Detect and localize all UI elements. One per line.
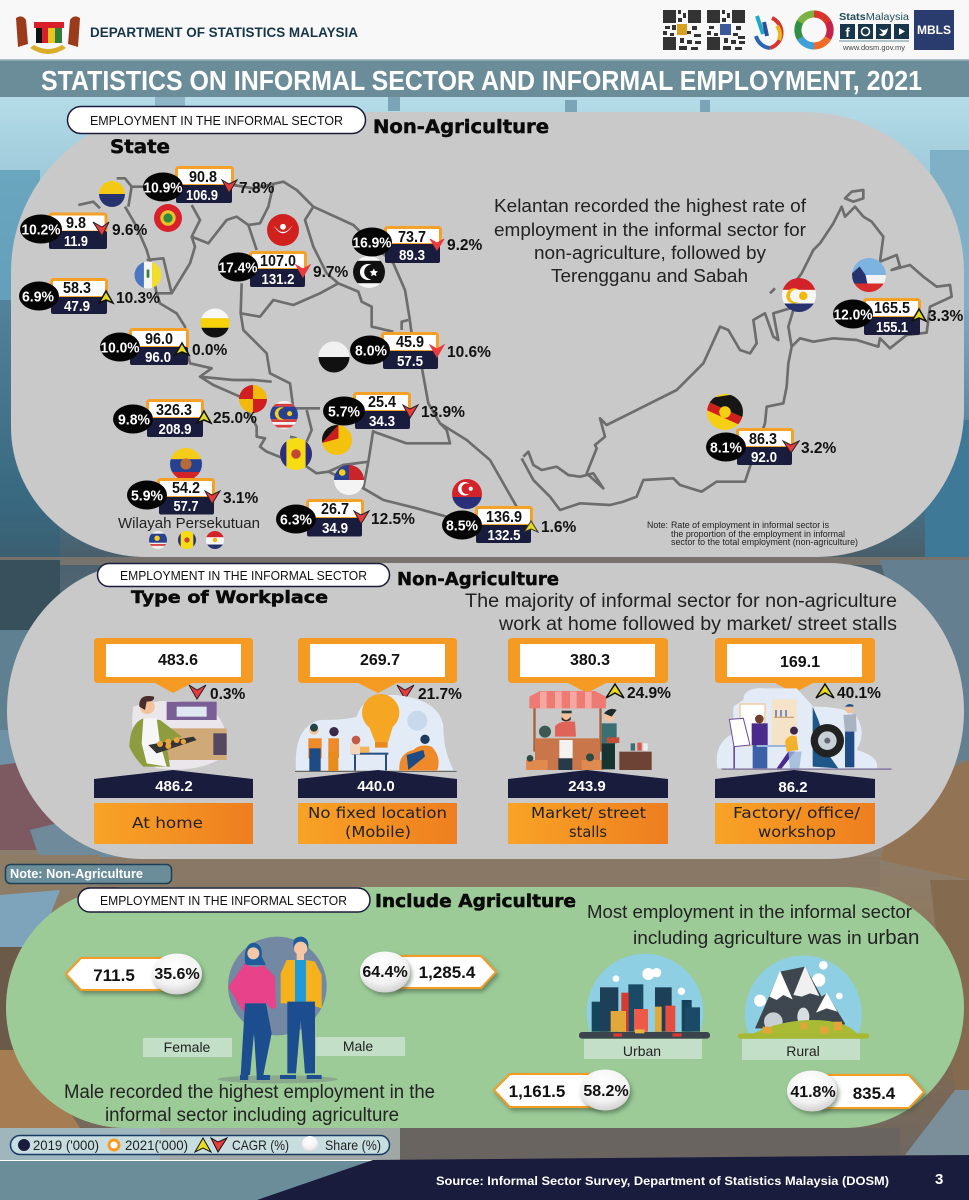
data: Melaka: 6.3% [280,512,312,528]
footer bar [0,1155,969,1200]
flag: Selangor [239,385,267,413]
note: rate definition: sector to the total employment (non-agriculture) [671,537,858,548]
data: Terengganu: 73.7 [398,229,426,246]
label: Male: Male [343,1038,373,1054]
QR code 2 [707,10,745,50]
statement: majority at home [465,591,897,635]
subheading: Type of Workplace: Type of Workplace [131,588,328,607]
logo: StatsMalaysia social: www.dosm.gov.my [842,43,905,52]
header bar [0,0,969,59]
data: Johor: 132.5 [488,527,520,544]
data: Perlis: 9.8 [66,215,86,232]
card: market/ street stalls: 380.3 [570,652,610,669]
data: Pahang: 57.5 [397,353,423,370]
data: Perak [100,330,228,366]
card: no fixed location: 440.0 [357,778,395,795]
flag: Sabah [852,258,886,292]
data: Sarawak: 86.3 [749,431,777,448]
data: Penang [19,280,160,315]
data: Selangor: 9.8% [118,412,150,428]
coat of arms logo [16,6,80,54]
flag: Malaysia [270,401,298,429]
flag: Kelantan [267,214,299,246]
flag: Putrajaya style [280,438,312,470]
data: Penang: 10.3% [116,290,160,307]
statement: Kelantan highest rate: employment in the informal sector for [494,220,806,240]
value tag: male [360,952,496,992]
value tag: male: 64.4% [362,964,408,981]
card: no fixed location: (Mobile) [345,823,411,841]
panel heading pill: EMPLOYMENT IN THE INFORMAL SECTOR [90,113,343,128]
panel heading pill [78,888,370,912]
data: Pahang: 45.9 [396,334,424,351]
flag: Terengganu [353,256,385,288]
data: Negeri Sembilan: 13.9% [421,404,465,421]
data: Melaka [276,500,415,537]
card: factory/ office/ workshop: workshop [758,823,836,841]
card: no fixed location: 269.7 [360,652,400,669]
logo: SDG wheel [798,14,830,46]
card: market/ street stalls: stalls [569,823,607,841]
value tag: female: 711.5 [93,966,135,985]
data: Terengganu: 89.3 [399,247,425,264]
data: Negeri Sembilan [323,394,465,430]
subheading: State: State [110,136,170,158]
data: Johor [442,508,577,544]
flag: Penang [134,262,162,288]
value tag: rural: 835.4 [853,1084,896,1103]
panel: type of workplace [7,563,964,859]
card: market/ street stalls [508,638,671,844]
data: Sarawak: 3.2% [801,440,837,457]
data: Penang: 47.9 [64,298,90,315]
card: no fixed location: No fixed location [308,804,447,822]
legend: Share (%) [325,1137,381,1153]
data: Kelantan: 9.7% [313,264,349,281]
card: no fixed location [295,638,462,844]
data: Sarawak: 92.0 [751,449,777,466]
statement: urban [587,901,919,949]
data: Federal Territory [127,480,259,515]
flag: Perlis [99,181,125,207]
card: at home: 0.3% [210,686,246,703]
statement: male highest: informal sector including agriculture [105,1105,399,1126]
data: Sabah: 155.1 [876,319,908,336]
data: Federal Territory: 3.1% [223,490,259,507]
data: Perlis: 9.6% [112,222,148,239]
data: Penang: 6.9% [22,288,54,306]
statement: Kelantan highest rate: Terengganu and Sabah [551,266,748,286]
data: Terengganu [352,228,483,264]
data: Sabah: 3.3% [928,308,964,325]
label: Urban: Urban [623,1043,661,1059]
data: Kedah: 106.9 [186,187,218,204]
data: Kedah [143,168,275,204]
card: market/ street stalls: 243.9 [568,778,606,795]
panel heading pill: EMPLOYMENT IN THE INFORMAL SECTOR [100,893,347,908]
statement: majority at home: work at home followed by market/ street stalls [498,614,897,635]
organisation name: DEPARTMENT OF STATISTICS MALAYSIA [90,25,358,40]
QR code 1 [663,10,701,50]
data: Penang: 58.3 [63,280,91,297]
legend: CAGR (%) [232,1137,289,1153]
panel heading pill: EMPLOYMENT IN THE INFORMAL SECTOR [120,568,367,583]
flag: Labuan [782,278,816,312]
legend: 2021('000) [125,1137,188,1153]
illustration: urban skyline [579,954,710,1039]
data: Johor: 1.6% [541,519,577,536]
label: Urban [584,1039,702,1059]
data: Perlis [20,214,148,250]
flag: Kedah [154,204,182,232]
illustration: rural mountains [738,956,869,1039]
statement: majority at home: The majority of informal sector for non-agriculture [465,591,897,612]
data: Kelantan: 131.2 [262,271,294,288]
statement: Kelantan highest rate [494,196,807,286]
logo: StatsMalaysia social [839,11,909,52]
data: Perak: 0.0% [192,342,228,359]
flag: Melaka [334,465,364,495]
data: Sarawak: 8.1% [710,440,742,456]
data: Federal Territory: 54.2 [172,480,200,497]
note chip: Note: Non-Agriculture [10,867,143,881]
illustration: mobile workers and light bulb [295,694,457,772]
label: Male [316,1037,405,1056]
flag: Sarawak [707,394,743,430]
value tag: urban: 1,161.5 [509,1082,565,1101]
statement: male highest: Male recorded the highest employment in the [64,1082,435,1103]
data: Negeri Sembilan: 5.7% [328,404,360,420]
panel: include agriculture [6,887,964,1128]
data: Perlis: 10.2% [22,222,60,238]
data: Kedah: 90.8 [189,169,217,186]
data: Selangor [113,400,257,438]
logo: MBLS: MBLS [917,23,951,37]
card: at home: 486.2 [155,778,193,795]
data: Kedah: 7.8% [239,180,275,197]
flag: Federal Territory [170,448,202,480]
note: rate definition: Note: [647,520,668,531]
label: Female: Female [164,1039,211,1055]
flag: Perak [200,308,230,338]
card: factory/ office/ workshop: 86.2 [778,779,808,796]
subheading: Include Agriculture: Include Agriculture [375,891,576,912]
flag: Negeri Sembilan [322,425,352,455]
value tag: female [66,954,202,994]
statement: male highest [64,1082,435,1126]
statement: Kelantan highest rate: non-agriculture, followed by [534,243,766,263]
legend: 2019 ('000) [33,1137,99,1153]
illustration: market stall [526,691,652,770]
data: Federal Territory: 5.9% [131,488,163,504]
data: Melaka: 12.5% [371,511,415,528]
data: Melaka: 34.9 [322,520,348,537]
data: Kelantan: 17.4% [218,260,258,276]
page number: 3 [935,1171,943,1188]
subheading: Non-Agriculture: Non-Agriculture [373,116,549,138]
data: Negeri Sembilan: 25.4 [368,394,396,411]
map: Peninsular Malaysia outline [78,178,517,533]
value tag: male: 1,285.4 [419,963,476,982]
map: East Malaysia outline [522,190,952,510]
card: at home [94,638,253,844]
data: Kelantan [218,252,349,288]
card: factory/ office/ workshop: 169.1 [780,654,820,671]
panel heading pill [68,106,366,134]
card: at home: At home [132,814,203,832]
data: Selangor: 208.9 [158,421,192,438]
data: Terengganu: 9.2% [447,237,483,254]
data: Sarawak [706,430,837,466]
label: Wilayah Persekutuan: Wilayah Persekutuan [118,516,260,532]
card: market/ street stalls: 24.9% [627,685,671,702]
mini flags: federal territories [149,531,224,549]
flag: Pahang [318,342,350,372]
card: market/ street stalls: Market/ street [531,804,646,822]
card: no fixed location: 21.7% [418,686,462,703]
statement: urban: including agriculture was in urban [633,926,919,949]
data: Sabah: 12.0% [834,306,872,324]
data: Sabah: 165.5 [874,300,910,317]
data: Melaka: 26.7 [321,501,349,518]
data: Negeri Sembilan: 34.3 [369,413,395,430]
data: Federal Territory: 57.7 [174,498,198,515]
data: Johor: 8.5% [446,518,478,534]
data: Sabah [833,300,964,336]
card: at home: 483.6 [158,652,198,669]
data: Pahang [350,334,491,370]
data: Pahang: 10.6% [447,344,491,361]
statement: Kelantan highest rate: Kelantan recorded the highest rate of [494,196,807,216]
illustration: male and female figures [218,937,338,1083]
logo: StatsMalaysia social: StatsMalaysia [839,11,909,23]
label: Rural [742,1039,860,1060]
data: Perlis: 11.9 [64,233,88,250]
value tag: rural: 41.8% [790,1084,836,1101]
data: Terengganu: 16.9% [352,234,392,252]
value tag: rural [787,1070,924,1112]
panel: state map [11,106,964,557]
data: Perak: 10.0% [100,340,140,356]
data: Kelantan: 107.0 [260,253,296,270]
card: factory/ office/ workshop [715,638,892,844]
subheading: Non-Agriculture: Non-Agriculture [397,569,559,590]
data: Selangor: 25.0% [213,410,257,427]
note chip [6,864,172,884]
logo: MBLS [914,10,954,50]
legend [10,1136,390,1154]
data: Perak: 96.0 [145,331,173,348]
flag: Johor [452,479,482,509]
label: Rural: Rural [786,1043,820,1059]
panel heading pill [98,564,390,586]
label: Female [143,1038,232,1057]
card: factory/ office/ workshop: 40.1% [837,685,881,702]
logo: swirl [756,16,782,48]
source text: Source: Informal Sector Survey, Department of Statistics Malaysia (DOSM) [436,1174,889,1188]
note: rate definition: the proportion of the employment in informal [671,529,845,540]
note: rate definition [647,520,858,548]
data: Selangor: 326.3 [156,402,192,419]
note: rate definition: Rate of employment in informal sector is [671,520,829,531]
value tag: urban: 58.2% [583,1083,629,1100]
illustration: office and workshop [717,688,892,769]
logo: StatsMalaysia social: f [845,25,850,40]
card: factory/ office/ workshop: Factory/ office/ [733,804,861,822]
data: Johor: 136.9 [486,509,522,526]
value tag: urban [494,1070,630,1110]
data: Perak: 96.0 [145,349,171,366]
data: Kedah: 10.9% [144,180,182,196]
illustration: baker at home [129,696,227,769]
value tag: female: 35.6% [154,966,200,983]
statement: urban: Most employment in the informal sector [587,901,912,922]
data: Pahang: 8.0% [355,342,387,360]
